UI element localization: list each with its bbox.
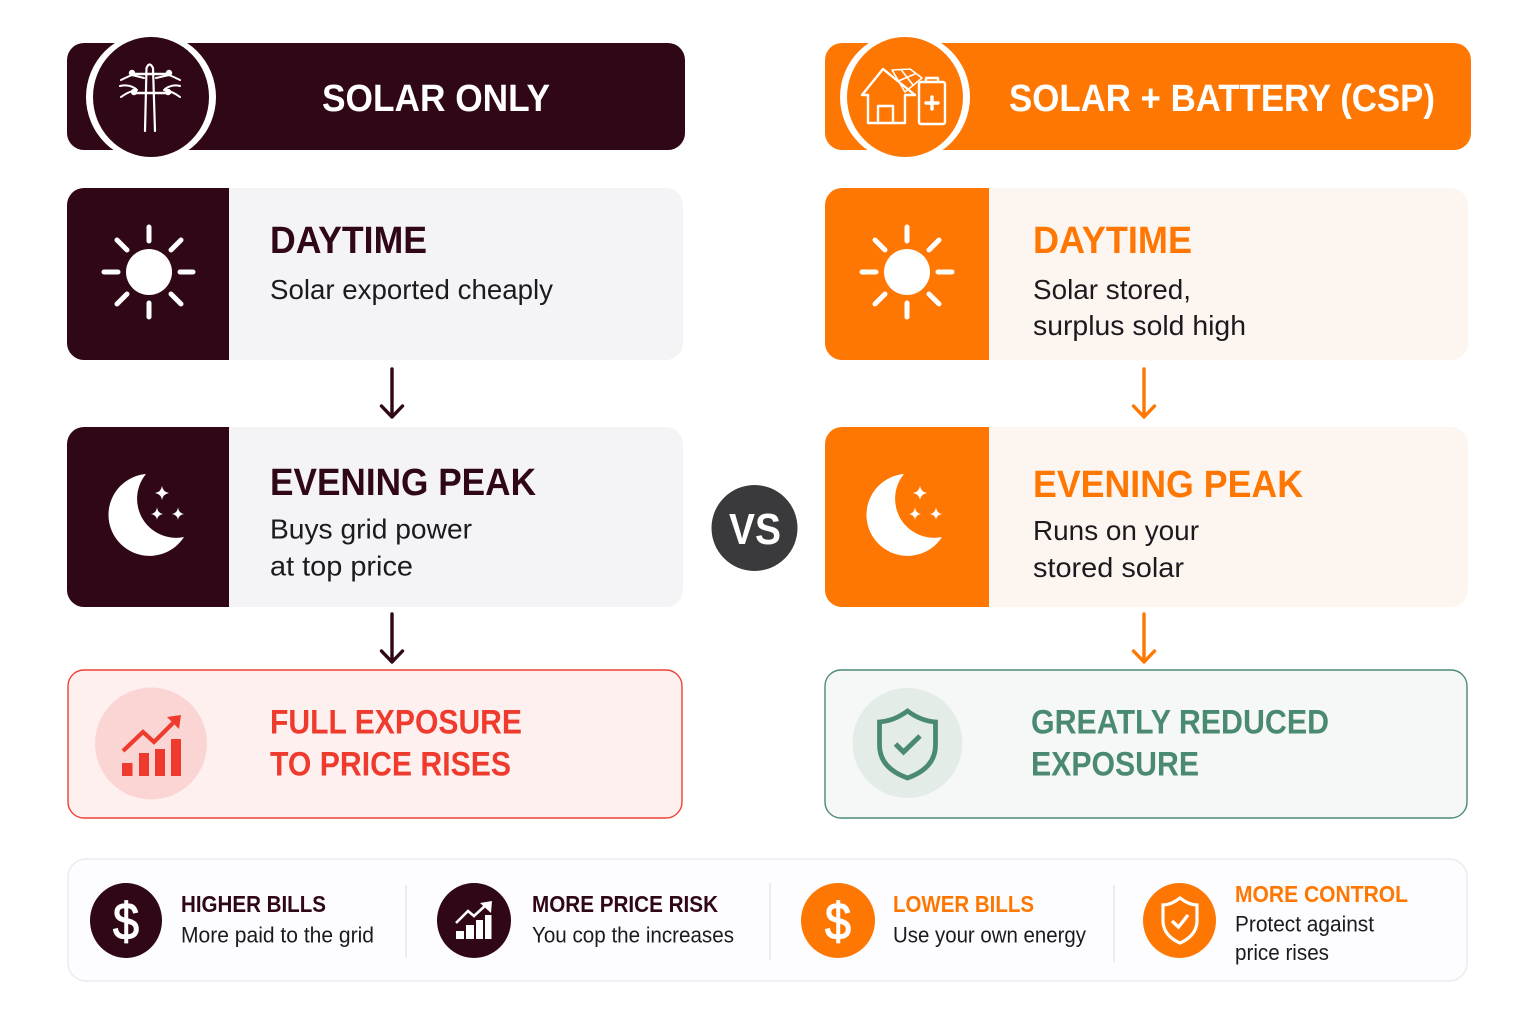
panel: solar only evening peak	[67, 427, 683, 607]
summary: more control: price rises	[1235, 940, 1329, 965]
heading: greatly reduced exposure: EXPOSURE	[1031, 746, 1199, 784]
icon: sun	[104, 227, 193, 317]
arrow: right daytime to evening	[1134, 369, 1154, 417]
arrow: left daytime to evening	[382, 369, 402, 417]
heading: solar only: SOLAR ONLY	[322, 78, 550, 120]
heading: solar + battery: SOLAR + BATTERY (CSP)	[1009, 78, 1435, 120]
heading: evening peak: EVENING PEAK	[1033, 464, 1304, 506]
icon: shield with check	[880, 711, 936, 778]
summary: more control: MORE CONTROL	[1235, 881, 1408, 907]
summary: lower bills: LOWER BILLS	[893, 891, 1034, 917]
summary: lower bills	[801, 883, 1086, 958]
heading: full exposure: TO PRICE RISES	[270, 746, 511, 784]
summary: more control	[1143, 881, 1408, 965]
icon: power pole	[120, 64, 180, 131]
heading: daytime: DAYTIME	[1033, 220, 1192, 262]
icon: house with solar panels and battery	[862, 69, 945, 124]
text: daytime description: Solar stored,	[1033, 274, 1191, 305]
panel: solar only header	[67, 32, 685, 162]
heading: daytime: DAYTIME	[270, 220, 427, 262]
text: evening description: stored solar	[1033, 552, 1184, 583]
summary: more price risk: You cop the increases	[532, 922, 734, 948]
panel: reduced exposure outcome	[825, 670, 1467, 818]
summary: higher bills: More paid to the grid	[181, 922, 374, 948]
summary: more price risk: MORE PRICE RISK	[532, 891, 718, 917]
text: evening description: Runs on your	[1033, 515, 1199, 546]
text: evening description: at top price	[270, 550, 413, 582]
panel: full exposure outcome	[68, 670, 682, 818]
icon: sun	[862, 227, 952, 317]
heading: evening peak: EVENING PEAK	[270, 462, 537, 504]
text: daytime description: surplus sold high	[1033, 310, 1246, 341]
arrow: right evening to outcome	[1134, 614, 1154, 662]
summary: more price risk	[437, 883, 734, 958]
badge: VS	[712, 485, 798, 571]
summary: lower bills: $	[825, 893, 851, 951]
arrow: left evening to outcome	[382, 614, 402, 662]
panel: battery evening peak	[825, 427, 1468, 607]
summary: higher bills	[90, 883, 374, 958]
heading: greatly reduced exposure: GREATLY REDUCED	[1031, 704, 1329, 742]
badge: VS: VS	[729, 505, 781, 554]
panel: solar + battery header	[825, 32, 1471, 162]
icon: rising chart	[122, 715, 181, 776]
summary: higher bills: $	[113, 893, 139, 951]
heading: full exposure: FULL EXPOSURE	[270, 704, 522, 742]
panel: battery daytime	[825, 188, 1468, 360]
text: daytime description: Solar exported cheaply	[270, 274, 553, 305]
summary: more control: Protect against	[1235, 912, 1374, 936]
icon: moon and stars	[866, 474, 942, 556]
summary: higher bills: HIGHER BILLS	[181, 891, 326, 917]
text: evening description: Buys grid power	[270, 514, 472, 544]
panel: solar only daytime	[67, 188, 683, 360]
summary: lower bills: Use your own energy	[893, 922, 1086, 948]
icon: moon and stars	[108, 474, 184, 556]
panel: summary strip	[68, 859, 1467, 981]
